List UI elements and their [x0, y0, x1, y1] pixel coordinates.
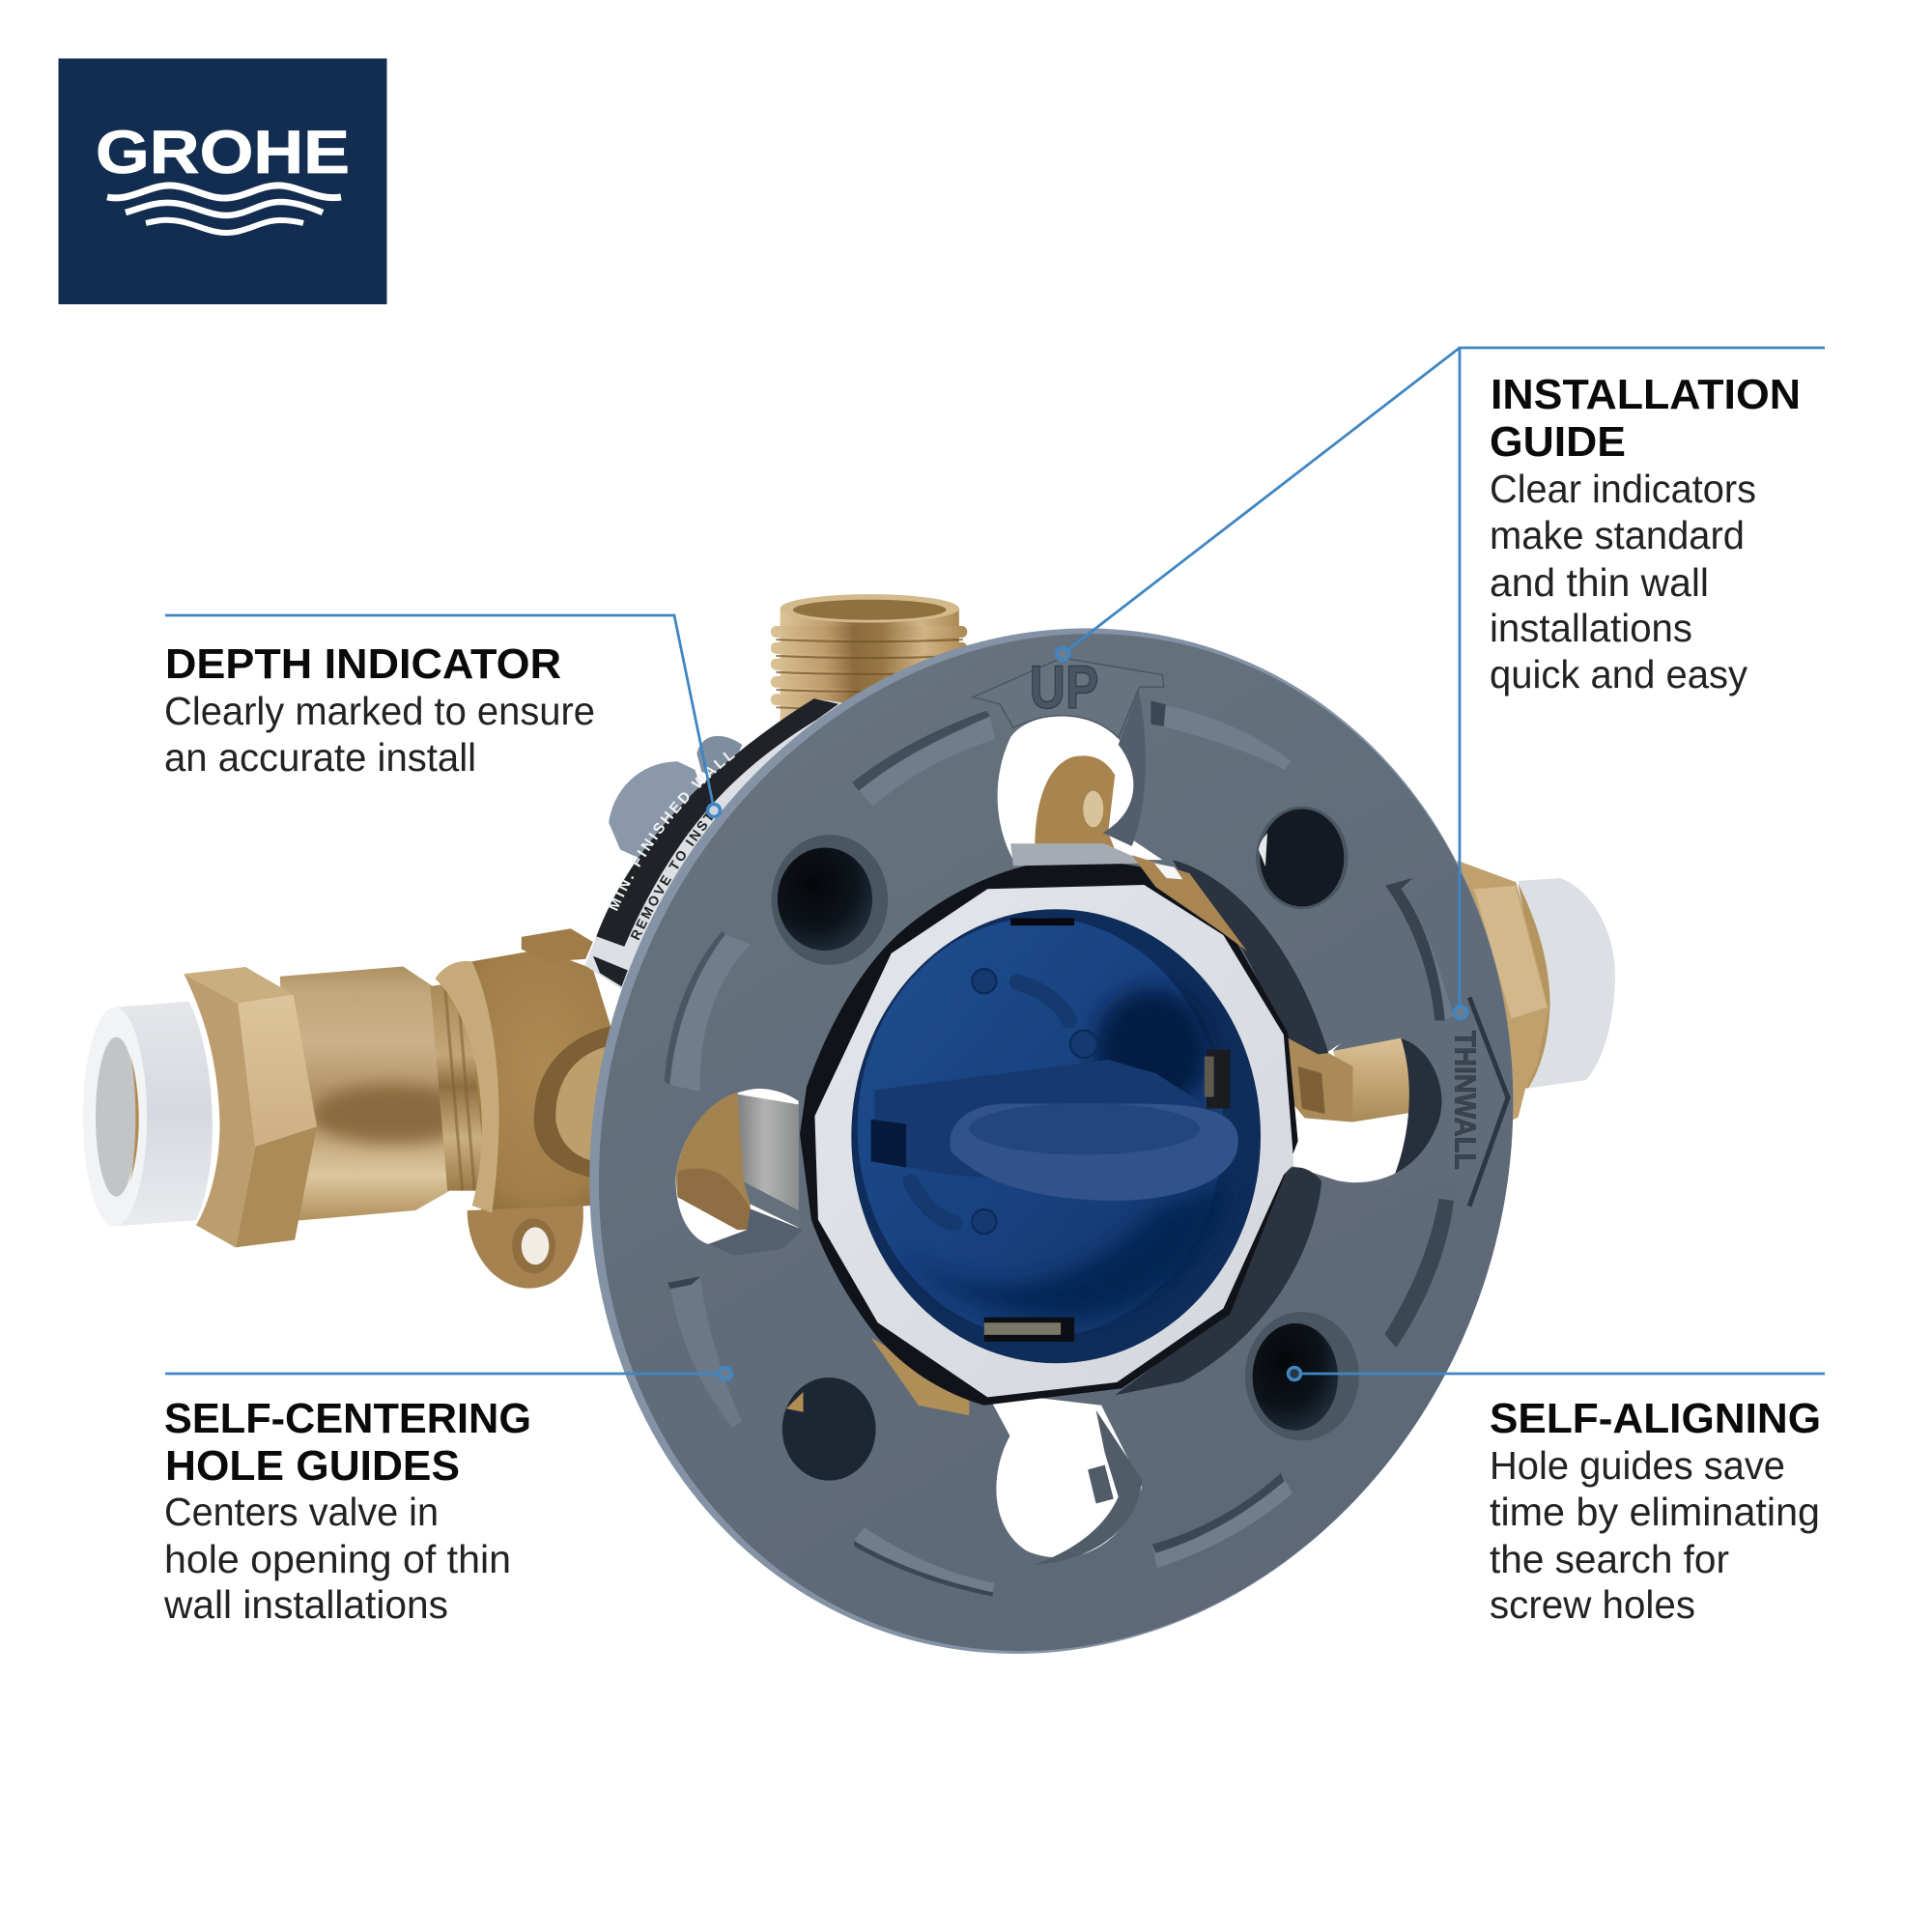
opening: right [1278, 1032, 1442, 1190]
text block: self-centering hole guides: wall installations [163, 1582, 448, 1627]
white pex sleeve [115, 1002, 213, 1226]
text block: depth indicator [164, 640, 595, 780]
logo: GROHE [58, 58, 386, 304]
opening: bottom [871, 1338, 1142, 1565]
raised arc ribs [665, 700, 1454, 1597]
text block: depth indicator: an accurate install [164, 735, 476, 780]
text block: installation guide: installations [1490, 606, 1692, 650]
text block: self-aligning: SELF-ALIGNING [1490, 1395, 1821, 1442]
top tab [522, 928, 593, 961]
text block: installation guide: Clear indicators [1490, 467, 1756, 511]
cap shadows [1094, 988, 1209, 1111]
text block: installation guide: and thin wall [1490, 560, 1709, 605]
text block: installation guide [1490, 371, 1801, 696]
text block: self-aligning: Hole guides save [1490, 1443, 1785, 1488]
band text: remove to: REMOVE TO INST [630, 812, 713, 941]
cast valve body [457, 950, 625, 1213]
callout line: self-aligning [1289, 1368, 1825, 1379]
text block: self-centering hole guides: SELF-CENTERING [164, 1395, 531, 1442]
neck [430, 981, 487, 1191]
text block: depth indicator: Clearly marked to ensure [164, 689, 595, 733]
depth label band [585, 698, 842, 989]
logo waves [107, 185, 341, 233]
arrow marking: THINWALL [1333, 997, 1508, 1207]
cap clips [984, 1318, 1074, 1342]
inner port fitting [534, 1026, 612, 1179]
text block: self-centering hole guides: Centers valve in [164, 1490, 439, 1534]
text block: self-centering hole guides: HOLE GUIDES [165, 1442, 460, 1490]
text block: self-centering hole guides: hole opening of thin [164, 1537, 511, 1581]
central recess [800, 843, 1328, 1406]
mounting plate disc [458, 507, 1644, 1775]
callout line: self-centering [165, 1368, 732, 1379]
text block: installation guide: quick and easy [1490, 652, 1747, 696]
opening: top [998, 691, 1162, 867]
grey stubs [609, 736, 742, 862]
text block: depth indicator: DEPTH INDICATOR [165, 640, 561, 688]
top threaded outlet [771, 594, 967, 730]
flange [436, 961, 499, 1213]
text block: installation guide: INSTALLATION [1491, 371, 1801, 418]
hex nut [184, 967, 317, 1247]
cap details [972, 969, 996, 993]
arrow marking: UP: UP [1030, 654, 1098, 722]
product: shower valve illustration [83, 476, 1615, 1654]
text block: self-aligning: screw holes [1490, 1582, 1695, 1627]
left inlet pipe assembly [83, 928, 625, 1289]
text block: installation guide: GUIDE [1490, 418, 1626, 466]
opening: left [676, 1089, 803, 1256]
logo wordmark: GROHE [96, 119, 350, 186]
right outlet [1454, 861, 1615, 1148]
callout line: installation guide [1057, 348, 1825, 1018]
plate and centre, drawn in local units [585, 594, 1615, 1654]
octagonal silver nut [814, 885, 1293, 1397]
arrow marking: THINWALL: THINWALL [1448, 1031, 1482, 1170]
text block: self-aligning: the search for [1490, 1537, 1729, 1581]
threaded cylinder [280, 967, 450, 1221]
screw hole guides [772, 807, 1359, 1481]
blue cap [851, 909, 1261, 1363]
text block: self-aligning [1490, 1395, 1821, 1627]
callout line: depth indicator [165, 615, 721, 817]
text block: installation guide: make standard [1490, 513, 1745, 557]
text block: self-aligning: time by eliminating [1490, 1490, 1820, 1534]
mounting ear [468, 1206, 583, 1289]
cap handle [874, 1060, 1230, 1188]
text block: self-centering hole guides [163, 1395, 531, 1627]
band text: min finished wall: MIN. FINISHED WALL [609, 752, 735, 911]
arrow marking: UP [973, 654, 1164, 738]
